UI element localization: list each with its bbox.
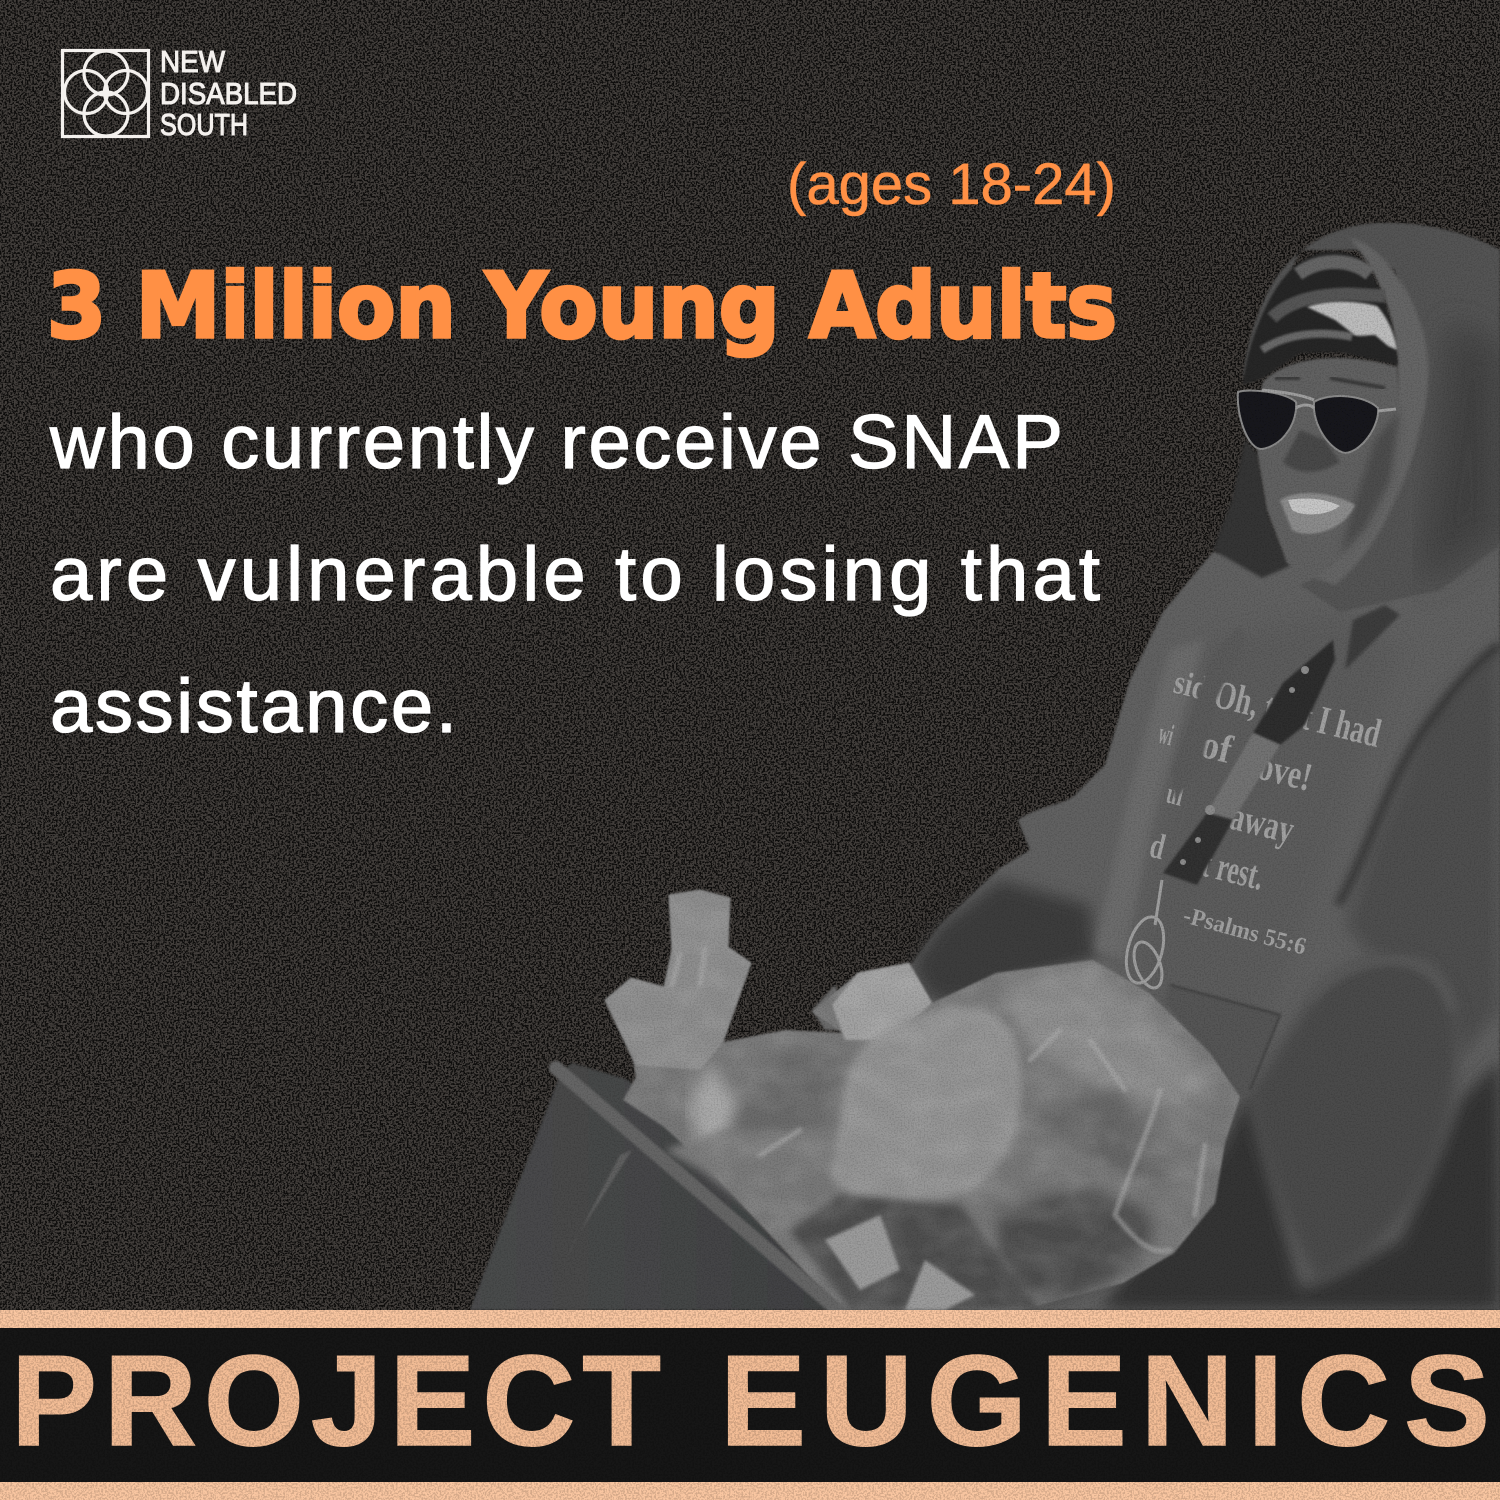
streaky lower left contents <box>665 1130 810 1240</box>
right forearm <box>1250 958 1458 1283</box>
logo wordmark: NEW <box>160 44 226 79</box>
banner title: PROJECT <box>11 1329 661 1473</box>
central bag <box>830 1006 1022 1202</box>
chest text on hoodie: away <box>1226 793 1299 852</box>
pocket <box>1167 993 1276 1092</box>
hood rim <box>1315 238 1429 585</box>
pocket seam <box>1170 985 1280 1090</box>
sunglasses <box>1238 390 1396 453</box>
chest text on hoodie: t rest. <box>1198 840 1269 899</box>
team logo on beanie <box>1307 302 1397 350</box>
chest text on hoodie: ul <box>1163 777 1187 813</box>
left sleeve shadow <box>911 880 1095 1000</box>
bright carton <box>832 963 932 1040</box>
age qualifier: (ages 18-24) <box>787 152 1116 217</box>
chest text on hoodie: sid <box>1170 664 1212 708</box>
shoulder fold shadow <box>1338 645 1500 905</box>
bin scratch <box>560 1150 632 1270</box>
lanyard collar section <box>1345 605 1400 670</box>
beanie stripes <box>1262 262 1385 350</box>
lanyard dark upper section <box>1253 640 1335 745</box>
chest text on hoodie: love! <box>1246 741 1317 800</box>
cart bin <box>470 1063 830 1310</box>
bright bag upper right <box>1000 965 1220 1100</box>
packaging label <box>825 1215 975 1310</box>
headline: 3 Million Young Adults <box>47 254 1117 359</box>
mouth <box>1280 493 1355 534</box>
chest text on hoodie: of <box>1197 721 1237 772</box>
bag lower contents <box>790 1195 1040 1310</box>
lanyard floral middle section <box>1207 733 1280 820</box>
grocery bags <box>600 885 1245 1310</box>
logo wordmark: SOUTH <box>160 107 248 142</box>
face <box>1257 358 1400 573</box>
body text <box>49 400 1100 749</box>
darker bag interior <box>720 1050 840 1160</box>
chest text on hoodie: Oh, that I had <box>1210 671 1386 756</box>
bag crease highlights <box>672 950 1205 1251</box>
eyebrows <box>1275 378 1385 388</box>
lanyard left strap <box>1172 625 1245 800</box>
bin rail <box>556 1068 840 1312</box>
bright knot and neck of bag <box>605 890 751 1070</box>
banner top stripe <box>0 1310 1500 1328</box>
chest text on hoodie: wi <box>1155 717 1177 752</box>
logo wordmark <box>160 44 297 142</box>
photo: woman in hoodie carrying a bin of groceries <box>470 223 1500 1312</box>
bag wrinkle texture <box>600 885 1245 1310</box>
beanie <box>1243 252 1398 385</box>
hoodie placket strip <box>1095 640 1205 960</box>
right shoulder and sleeve <box>1345 640 1500 1060</box>
body text: assistance. <box>50 664 457 749</box>
logo <box>62 44 297 142</box>
hoodie front panel <box>1130 610 1400 1060</box>
lanyard dark lower section <box>1163 813 1233 885</box>
hood inner shadow <box>1420 320 1500 585</box>
banner grain <box>0 1310 1500 1500</box>
forearm rim highlight <box>1380 958 1452 1006</box>
chest text on hoodie: -Psalms 55:6 <box>1180 903 1309 960</box>
banner title <box>11 1329 1490 1473</box>
banner title: EUGENICS <box>720 1329 1490 1473</box>
bag right shade <box>1030 1090 1170 1180</box>
chest text on hoodie <box>1146 664 1386 960</box>
lanyard clip <box>1120 880 1170 992</box>
hoodie body <box>911 541 1500 1310</box>
banner bottom stripe <box>0 1482 1500 1500</box>
bag base shape <box>605 890 1240 1310</box>
nose shadow <box>1283 430 1340 472</box>
hand behind carton <box>812 985 850 1030</box>
hair <box>1213 440 1290 578</box>
cheek shade <box>1342 416 1400 549</box>
lanyard floral dots <box>1180 666 1309 865</box>
logo mark: square with overlapping circles <box>62 50 148 136</box>
banner black band <box>0 1328 1500 1482</box>
chest text on hoodie: d <box>1146 825 1169 867</box>
produce in bag <box>996 1192 1151 1305</box>
body text: who currently receive SNAP <box>49 400 1063 485</box>
hood <box>1243 223 1500 612</box>
bottom banner <box>0 1310 1500 1500</box>
left bag highlight <box>690 1060 740 1150</box>
body text: are vulnerable to losing that <box>50 532 1100 617</box>
logo wordmark: DISABLED <box>160 76 297 111</box>
bottom right dark area <box>1100 1060 1500 1310</box>
